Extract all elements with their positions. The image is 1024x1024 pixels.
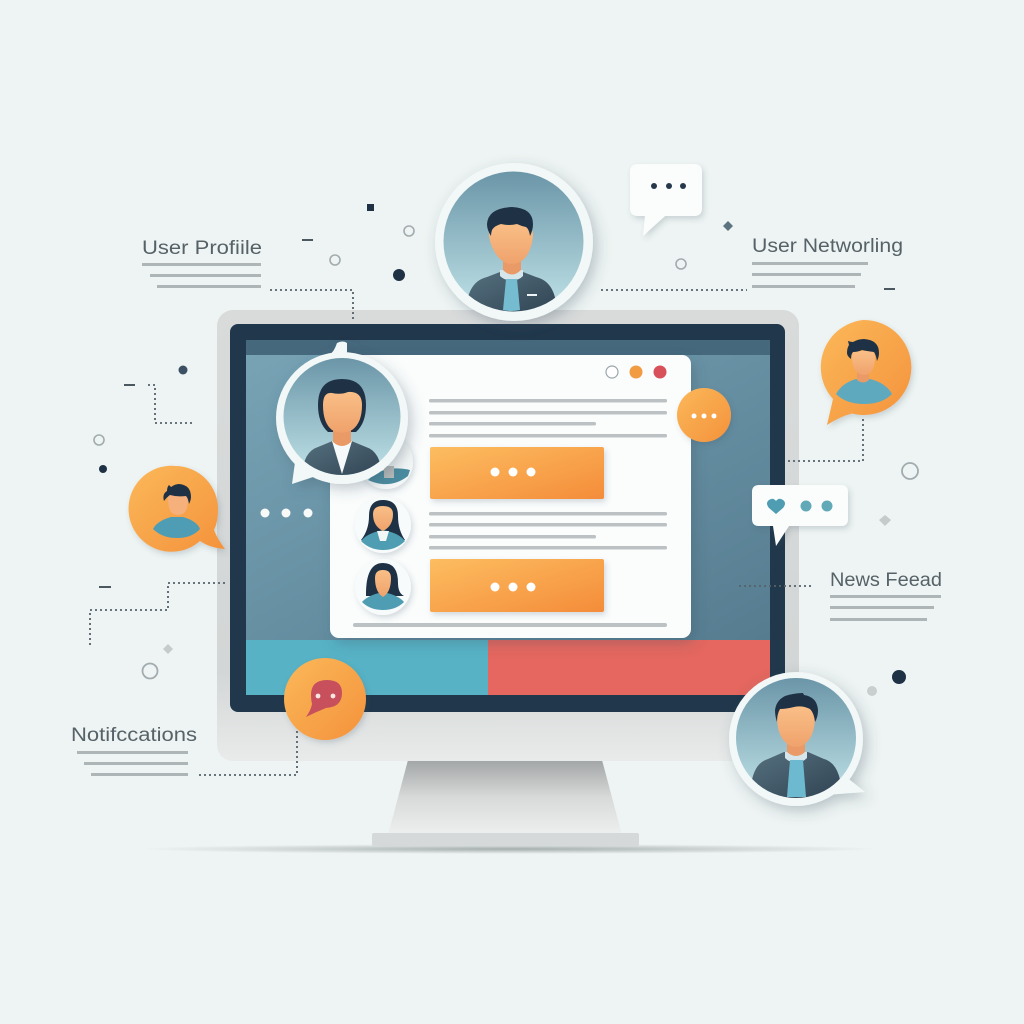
avatar disc (284, 358, 400, 475)
man hair (775, 693, 818, 722)
label: User Profile: User Profiile (142, 238, 262, 259)
man collar (500, 270, 523, 280)
avatar disc (444, 172, 584, 312)
monitor (140, 310, 880, 854)
bubble shape (129, 466, 225, 552)
bubble shape (821, 320, 911, 425)
man tie (787, 760, 806, 797)
footer line (353, 623, 667, 627)
hair (847, 339, 879, 361)
screen dots (260, 508, 312, 518)
man suit (468, 272, 555, 312)
window control dots (606, 366, 666, 378)
large avatar: woman profile bubble (276, 342, 408, 484)
orange button 1 (430, 447, 604, 499)
hair (163, 484, 191, 504)
bubble: heart chat (752, 485, 848, 546)
avatar disc (736, 678, 856, 798)
man face (489, 223, 533, 264)
neck (857, 372, 869, 382)
large avatar: bottom right man (729, 672, 865, 806)
face (168, 494, 188, 515)
orange button 2 (430, 559, 604, 612)
decorative dots and marks (94, 204, 918, 696)
man face (777, 706, 815, 747)
bubble: notification icon (284, 658, 366, 740)
small avatar hidden (359, 435, 413, 489)
man pocket square (527, 294, 537, 296)
text lines block 1 (429, 399, 667, 438)
man neck (787, 740, 805, 756)
woman shirt (332, 441, 352, 474)
label: User Networking: User Networling (752, 236, 903, 257)
face (852, 351, 875, 375)
bubble: orange man left (129, 466, 225, 552)
text lines block 2 (429, 512, 667, 550)
orange disc (284, 658, 366, 740)
label: Notifications (71, 725, 197, 776)
label: Notifications: Notifccations (71, 725, 197, 746)
label: User Networking (752, 236, 903, 288)
screen bezel (230, 324, 785, 712)
shoulders (153, 517, 200, 538)
man suit (750, 752, 842, 800)
teal bottom bar (246, 640, 488, 695)
man collar (785, 752, 807, 762)
monitor shadow on floor (140, 844, 880, 854)
shoulders (836, 379, 892, 404)
bubble ring with tails (276, 342, 408, 484)
bubble ring with tail (729, 672, 865, 806)
bubble: orange dots on window (677, 388, 731, 442)
man neck (503, 256, 521, 274)
monitor stand (388, 760, 622, 835)
small avatar woman 2 (355, 559, 411, 615)
screen top band (246, 340, 770, 355)
woman neck (333, 428, 351, 446)
red bottom bar (488, 640, 770, 695)
woman face (323, 392, 362, 432)
chat glyph (306, 680, 342, 717)
monitor base (372, 833, 639, 846)
bubble: orange man top right (821, 320, 911, 425)
dotted connectors (90, 290, 863, 775)
woman suit (304, 440, 380, 475)
monitor body (217, 310, 799, 761)
avatar ring (435, 163, 593, 321)
panel: feed window (330, 355, 691, 638)
label: News Feed (830, 570, 942, 621)
screen background (246, 355, 770, 640)
woman hair (318, 379, 366, 432)
man tie (503, 279, 520, 311)
large avatar: top man (435, 163, 593, 321)
small avatar woman 1 (355, 497, 411, 553)
label: News Feed: News Feead (830, 570, 942, 591)
bubble: white chat top (630, 164, 702, 236)
window card (330, 355, 691, 638)
label: User Profile (142, 238, 262, 288)
man hair (487, 207, 533, 236)
